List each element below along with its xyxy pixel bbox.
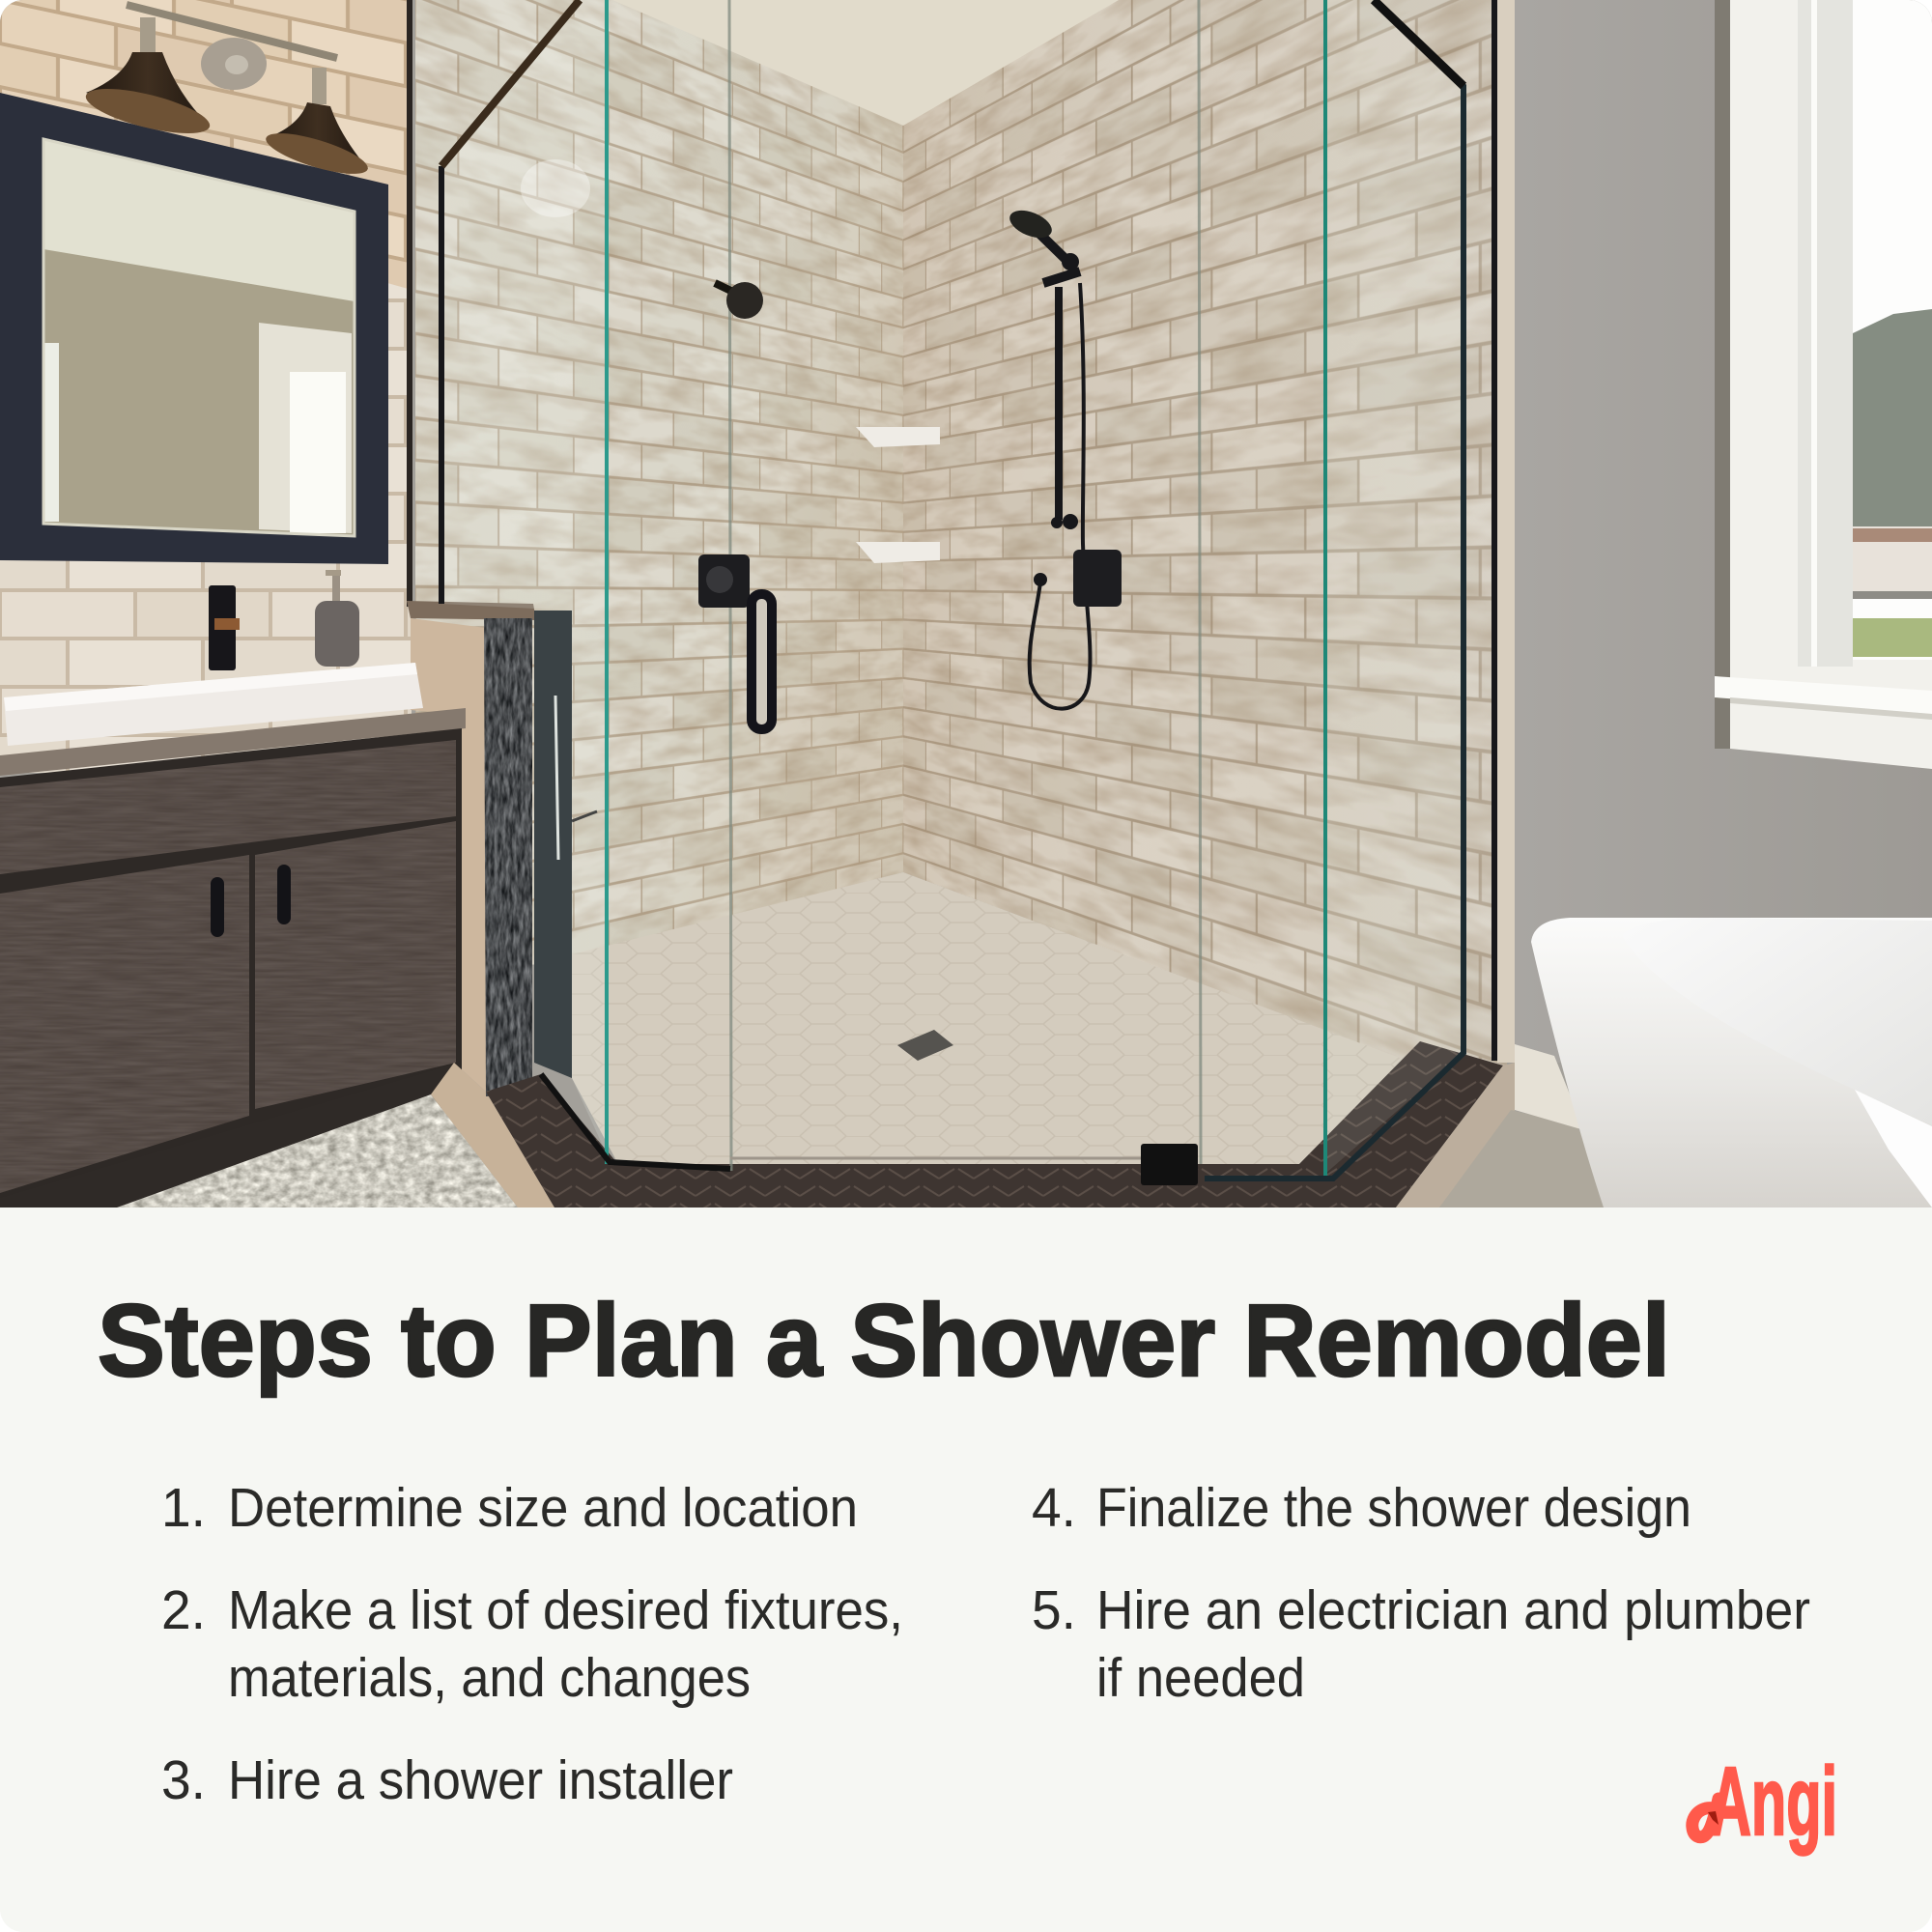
hand shower	[1006, 205, 1090, 709]
step 2	[161, 1579, 903, 1709]
bathtub	[1531, 918, 1932, 1208]
glass covered stone column	[534, 611, 597, 1078]
step 3: Hire a shower installer	[228, 1749, 733, 1811]
step 1: 1.	[161, 1477, 206, 1539]
shower curb	[486, 1041, 1503, 1208]
tile wall: shower back right	[903, 0, 1507, 1090]
room scene artwork	[0, 0, 1932, 1208]
bathroom floor	[1439, 1110, 1642, 1208]
bottom rail left	[541, 1074, 730, 1169]
faucet	[209, 585, 240, 670]
step 4: Finalize the shower design	[1096, 1477, 1691, 1539]
step 4: 4.	[1032, 1477, 1076, 1539]
shower glass enclosure	[441, 0, 1497, 1185]
title: Steps to Plan a Shower Remodel	[98, 1284, 1670, 1398]
logo: Angi	[1692, 1747, 1837, 1856]
sink	[4, 663, 423, 746]
shower head	[715, 282, 763, 319]
cabinet handles	[211, 865, 291, 937]
step 5: if needed	[1096, 1647, 1305, 1709]
step 3: 3.	[161, 1749, 206, 1811]
floor tile strip under half wall	[431, 1063, 554, 1208]
tile wall: shower back left	[415, 0, 903, 964]
mirror	[0, 93, 388, 564]
glass edge right	[1323, 0, 1327, 1179]
ceiling	[612, 0, 1119, 126]
step 5: 5.	[1032, 1579, 1076, 1641]
step 5	[1032, 1579, 1810, 1709]
step 2: 2.	[161, 1579, 206, 1641]
tile strip under curb right	[1396, 1063, 1515, 1208]
step 2: materials, and changes	[228, 1647, 751, 1709]
far left tile wall	[0, 0, 412, 773]
baseboard	[1515, 1044, 1584, 1130]
door valve plate	[698, 554, 750, 608]
window	[1715, 0, 1932, 769]
threshold strip	[730, 1157, 1141, 1159]
step 1: Determine size and location	[228, 1477, 858, 1539]
vanity cabinet	[0, 728, 464, 1208]
drain	[897, 1030, 953, 1061]
outer black trim right	[1492, 0, 1497, 1061]
step 5: Hire an electrician and plumber	[1096, 1579, 1810, 1641]
black wall trim left	[407, 0, 412, 607]
photo: bathroom with glass shower	[0, 0, 1932, 1208]
half wall stone column	[484, 618, 532, 1096]
right frame	[1205, 0, 1463, 1179]
door handle	[752, 594, 772, 729]
logo: Angi: Angi	[1710, 1747, 1837, 1856]
panel: steps text	[0, 1208, 1932, 1932]
soap dispenser	[315, 570, 359, 667]
wall section right of the shower	[1497, 0, 1932, 1063]
door edge left	[729, 0, 731, 1171]
half wall tile side	[411, 618, 486, 1092]
glass clamp	[1141, 1144, 1198, 1185]
half wall cap	[407, 601, 536, 620]
step 2: Make a list of desired fixtures,	[228, 1579, 903, 1641]
left frame	[439, 166, 444, 604]
shower valve plate	[1073, 550, 1122, 607]
lamp reflection in glass	[521, 159, 590, 217]
wall light fixture	[82, 5, 372, 182]
floor rug	[117, 1094, 518, 1208]
corner shelves	[856, 427, 940, 563]
glass edge left	[605, 0, 609, 1164]
countertop	[0, 708, 466, 776]
door edge right	[1199, 0, 1201, 1164]
shower floor	[572, 872, 1405, 1164]
